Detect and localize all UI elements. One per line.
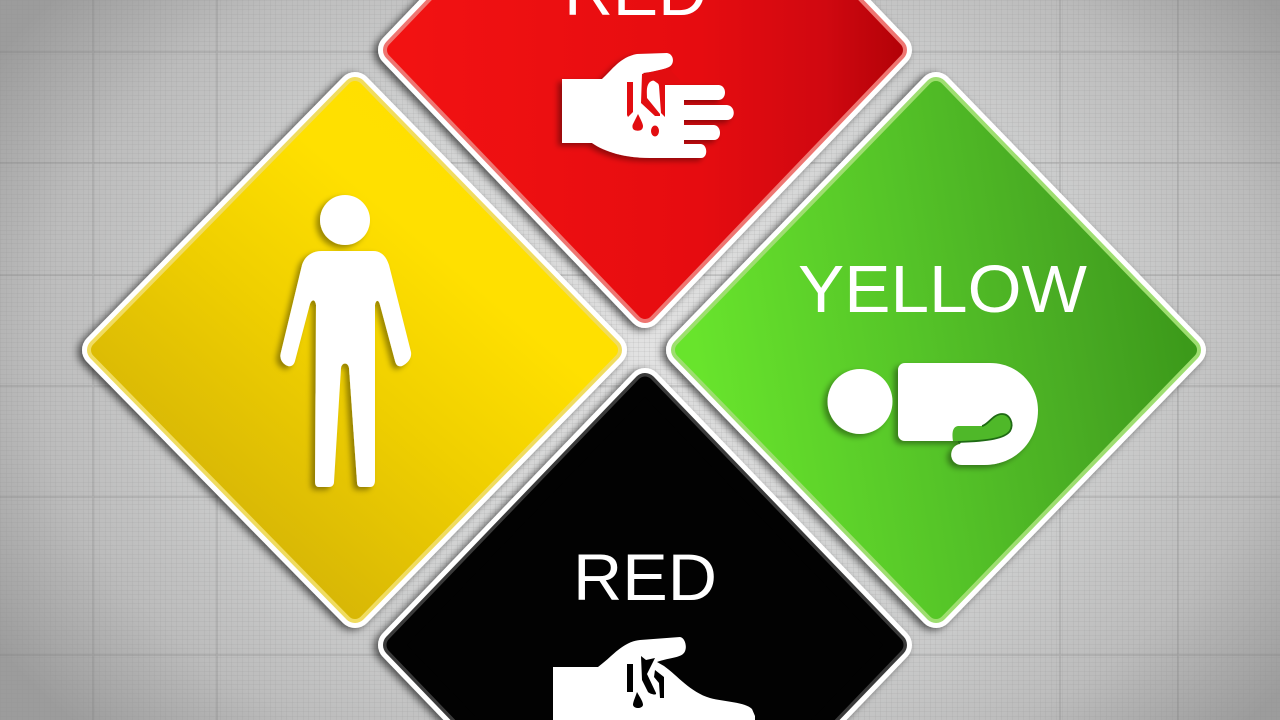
icon: bleeding hand, cropped: [553, 637, 755, 720]
icon: standing person: [280, 195, 411, 487]
icon: person in recovery position: [828, 363, 1038, 465]
heading: YELLOW: YELLOW: [798, 252, 1088, 327]
panel: black diamond: [395, 385, 895, 720]
heading: RED (bottom): RED: [573, 540, 717, 614]
panel: green diamond: [683, 89, 1189, 611]
panel: red diamond: [395, 0, 895, 311]
icon: bleeding hand: [562, 53, 734, 158]
panel: yellow diamond: [99, 89, 610, 611]
